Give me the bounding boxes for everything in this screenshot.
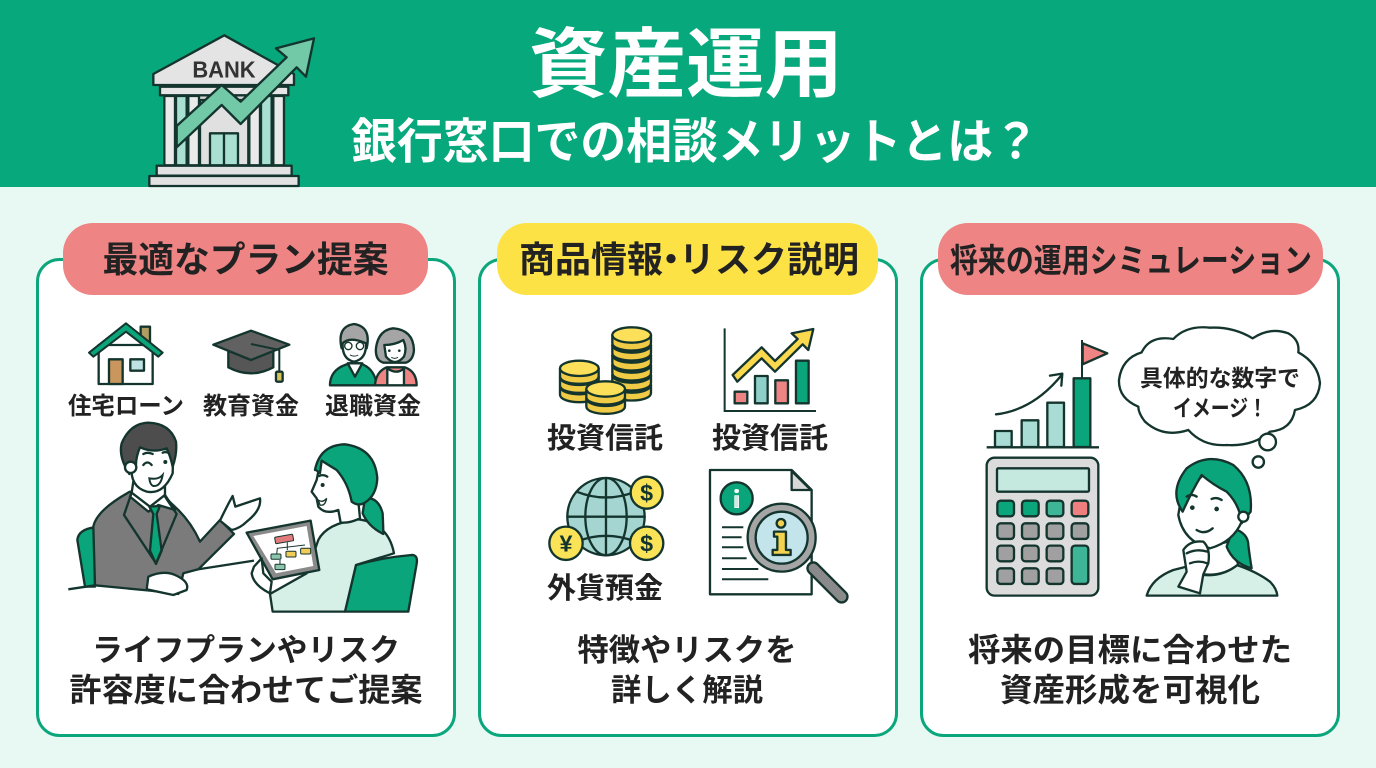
illustrations: products <box>549 327 842 597</box>
panel: 将来の運用シミュレーション <box>922 223 1338 736</box>
header band <box>0 0 1376 187</box>
body text: 将来の目標に合わせた <box>968 632 1292 668</box>
label: 教育資金: 教育資金 <box>203 393 299 420</box>
illustrations: life events and consultation <box>68 323 417 612</box>
title: 資産運用 <box>529 23 843 108</box>
panel: 最適なプラン提案 <box>38 223 454 736</box>
label: BANK: BANK <box>192 56 256 82</box>
pill heading <box>938 223 1323 295</box>
label: 外貨預金: 外貨預金 <box>547 572 663 605</box>
body text <box>968 632 1292 708</box>
rising arrow <box>177 38 314 147</box>
pill heading: 最適なプラン提案 <box>102 239 388 280</box>
thought bubble text: イメージ！ <box>1173 395 1267 421</box>
icon: document with magnifier <box>710 470 842 597</box>
icon: globe with currency coins: $ <box>640 531 653 557</box>
icon: retired couple <box>330 324 417 385</box>
label: 投資信託 (coins): 投資信託 <box>547 422 663 455</box>
body text: 特徴やリスクを <box>578 633 796 668</box>
label: 退職資金: 退職資金 <box>325 393 421 420</box>
illustration: thinking woman <box>1147 459 1277 596</box>
label: 住宅ローン: 住宅ローン <box>68 393 184 420</box>
icon: house <box>89 323 163 384</box>
body text: 許容度に合わせてご提案 <box>70 672 422 708</box>
icon: calculator <box>987 458 1098 596</box>
illustration: adviser in suit <box>68 423 260 595</box>
body text: ライフプランやリスク <box>92 633 400 668</box>
thought bubble text <box>1140 365 1300 421</box>
pill heading: 商品情報・リスク説明 <box>519 239 859 280</box>
thought bubble text: 具体的な数字で <box>1140 365 1300 391</box>
icon: globe with currency coins <box>549 477 663 560</box>
icon: globe with currency coins: ¥ <box>560 531 573 557</box>
icon: graduation cap <box>213 331 289 382</box>
body text: 詳しく解説 <box>611 673 763 708</box>
icon: globe with currency coins: $ <box>640 480 653 506</box>
illustration: customer with tablet <box>247 444 417 612</box>
subtitle: 銀行窓口での相談メリットとは？ <box>351 116 1039 169</box>
body text <box>578 633 796 708</box>
thought bubble <box>1119 327 1320 468</box>
pill heading <box>497 223 878 295</box>
icon: growth chart with flag <box>987 340 1107 447</box>
pill heading <box>63 223 428 295</box>
icon: bar chart with arrow <box>725 328 816 411</box>
panel: 商品情報・リスク説明 <box>480 223 896 736</box>
body text: 資産形成を可視化 <box>1000 672 1260 708</box>
illustrations: simulation <box>987 327 1320 596</box>
pill heading: 将来の運用シミュレーション <box>950 242 1312 279</box>
label: 投資信託 (chart): 投資信託 <box>712 422 828 455</box>
icon: coin stacks <box>560 327 651 414</box>
icon: bank with rising arrow <box>149 35 314 186</box>
body text <box>70 633 422 708</box>
